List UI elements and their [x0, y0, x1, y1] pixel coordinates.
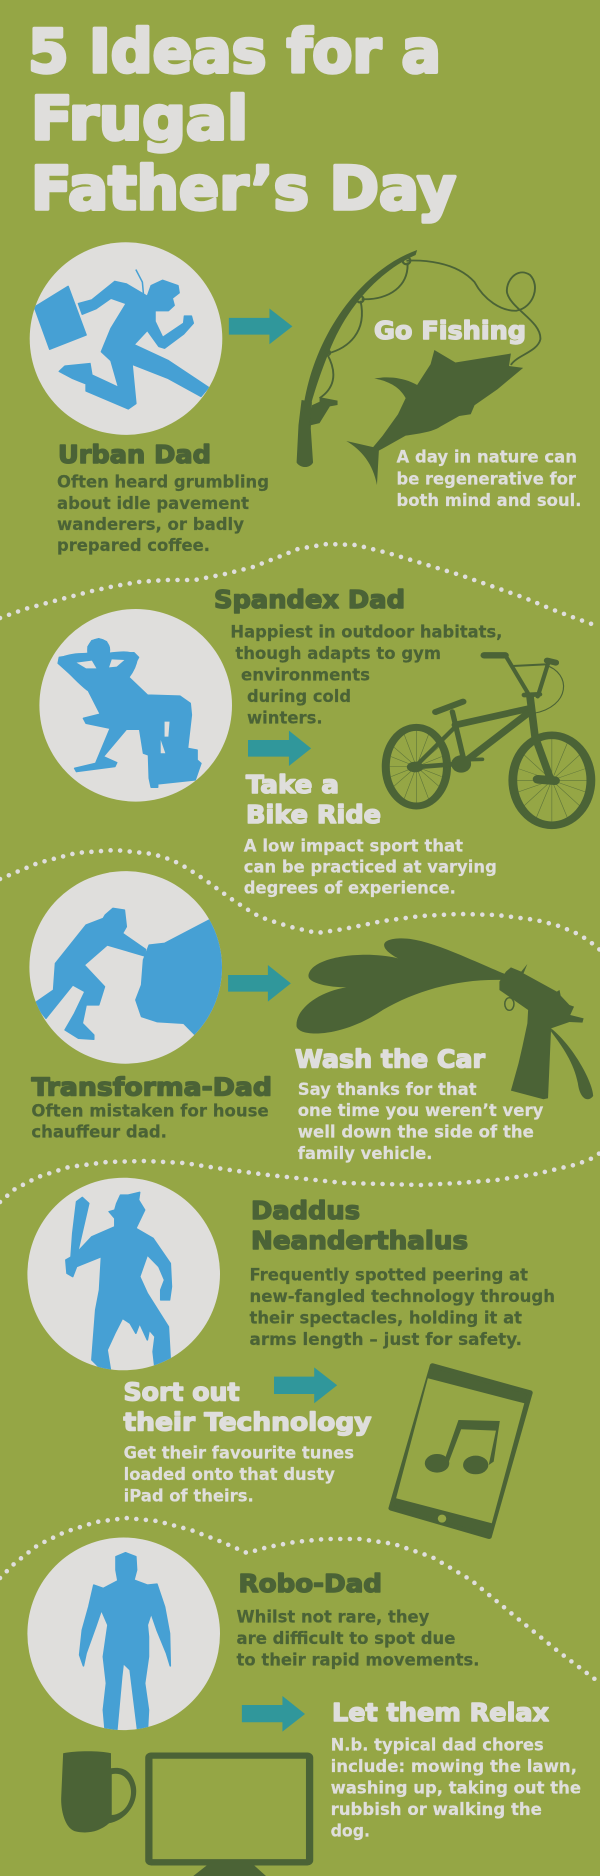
text: Urban Dad description: Often heard grumbling: [57, 472, 269, 492]
icon: fishing rod and tuna: [297, 250, 540, 485]
text: bike ride description: can be practiced at varying: [244, 858, 497, 878]
portrait circle: Robo-Dad: [27, 1538, 220, 1732]
arrow: [228, 965, 291, 1002]
panel: Spandex Dad: [39, 585, 591, 898]
text: Let them Relax description: include: mowing the lawn,: [331, 1757, 577, 1777]
text: Neanderthalus description: [250, 1266, 555, 1350]
title: Father’s Day: [31, 154, 456, 224]
heading: Transforma-Dad: Transforma-Dad: [32, 1072, 272, 1102]
icon: mug: [61, 1751, 136, 1832]
heading: Daddus Neanderthalus: [251, 1196, 468, 1255]
panel: Robo-Dad: [27, 1538, 581, 1876]
text: bike ride description: A low impact sport that: [244, 837, 463, 857]
text: wash the car description: family vehicle.: [298, 1144, 432, 1164]
text: wash the car description: [298, 1080, 543, 1164]
text: Go Fishing description: both mind and soul.: [396, 491, 582, 511]
title: Frugal: [31, 84, 248, 154]
text: Let them Relax description: rubbish or walking the: [331, 1800, 542, 1820]
text: wash the car description: one time you weren’t very: [298, 1101, 543, 1121]
heading: Go Fishing: Go Fishing: [374, 316, 526, 345]
text: Transforma-Dad description: chauffeur dad.: [31, 1123, 167, 1143]
text: Spandex Dad description: during cold: [247, 687, 351, 707]
heading: Let them Relax: Let them Relax: [332, 1698, 549, 1727]
text: Neanderthalus description: Frequently spotted peering at: [250, 1266, 528, 1286]
text: Spandex Dad description: though adapts to gym: [235, 644, 441, 664]
portrait circle: Transforma-Dad: [29, 871, 237, 1064]
text: Neanderthalus description: their spectacles, holding it at: [250, 1308, 522, 1328]
text: Spandex Dad description: [230, 623, 502, 729]
text: Spandex Dad description: environments: [241, 665, 370, 685]
panel: Daddus Neanderthalus: [27, 1178, 555, 1537]
text: Let them Relax description: [331, 1736, 581, 1842]
text: Neanderthalus description: new-fangled technology through: [250, 1287, 555, 1307]
heading: Daddus Neanderthalus: Daddus: [251, 1196, 360, 1225]
heading: Sort out their Technology: their Technology: [124, 1408, 372, 1436]
text: bike ride description: degrees of experience.: [244, 878, 456, 898]
text: Go Fishing description: be regenerative for: [396, 470, 577, 490]
text: Let them Relax description: dog.: [331, 1822, 370, 1842]
heading: Urban Dad: Urban Dad: [58, 440, 211, 469]
icon: bicycle: [386, 655, 591, 825]
icon: computer monitor: [149, 1756, 310, 1876]
title: [28, 17, 456, 224]
text: wash the car description: Say thanks for that: [298, 1080, 477, 1100]
text: Go Fishing description: [396, 448, 582, 511]
icon: tablet with music note: [391, 1366, 530, 1537]
text: Transforma-Dad description: [31, 1102, 269, 1143]
portrait circle: Spandex Dad: [39, 609, 232, 802]
text: Transforma-Dad description: Often mistaken for house: [31, 1102, 269, 1122]
text: Go Fishing description: A day in nature can: [396, 448, 577, 468]
heading: Take a Bike Ride: [246, 770, 381, 829]
text: bike ride description: [244, 837, 497, 898]
heading: Take a Bike Ride: Take a: [246, 770, 339, 799]
text: Robo-Dad description: Whilst not rare, they: [236, 1608, 429, 1628]
title: 5 Ideas for a: [28, 17, 441, 87]
icon: hose spraying water: [296, 938, 593, 1099]
text: Robo-Dad description: are difficult to spot due: [236, 1629, 455, 1649]
dotted divider 2: [0, 850, 600, 950]
text: wash the car description: well down the side of the: [298, 1123, 534, 1143]
text: Robo-Dad description: [236, 1608, 480, 1671]
panel: Transforma-Dad: [29, 871, 593, 1164]
heading: Sort out their Technology: [124, 1378, 372, 1436]
text: Neanderthalus description: arms length – just for safety.: [250, 1330, 522, 1350]
heading: Spandex Dad: Spandex Dad: [214, 585, 405, 614]
arrow: [229, 309, 292, 344]
text: Let them Relax description: washing up, taking out the: [331, 1779, 581, 1799]
heading: Sort out their Technology: Sort out: [124, 1378, 240, 1406]
dotted divider 1: [0, 544, 600, 627]
text: technology description: loaded onto that dusty: [124, 1465, 335, 1485]
text: Spandex Dad description: Happiest in outdoor habitats,: [230, 623, 502, 643]
heading: Robo-Dad: Robo-Dad: [238, 1569, 382, 1598]
panel: Urban Dad: [30, 242, 581, 556]
text: technology description: iPad of theirs.: [124, 1487, 254, 1507]
arrow: [242, 1696, 305, 1732]
text: Urban Dad description: [57, 472, 269, 556]
text: Urban Dad description: about idle pavement: [57, 494, 249, 514]
text: Let them Relax description: N.b. typical dad chores: [331, 1736, 544, 1756]
dotted divider 3: [0, 1153, 600, 1202]
text: technology description: [124, 1444, 354, 1507]
heading: Daddus Neanderthalus: Neanderthalus: [251, 1226, 468, 1255]
portrait circle: Urban Dad: [30, 242, 222, 435]
text: Robo-Dad description: to their rapid movements.: [236, 1651, 480, 1671]
arrow: [248, 731, 311, 766]
text: Urban Dad description: prepared coffee.: [57, 536, 210, 556]
heading: Wash the Car: Wash the Car: [295, 1044, 486, 1074]
text: Spandex Dad description: winters.: [247, 709, 323, 729]
portrait circle: Daddus Neanderthalus: [27, 1178, 220, 1373]
text: Urban Dad description: wanderers, or badly: [57, 515, 244, 535]
dotted divider 4: [0, 1518, 600, 1683]
arrow: [274, 1367, 337, 1403]
text: technology description: Get their favourite tunes: [124, 1444, 354, 1464]
heading: Take a Bike Ride: Bike Ride: [246, 800, 381, 829]
